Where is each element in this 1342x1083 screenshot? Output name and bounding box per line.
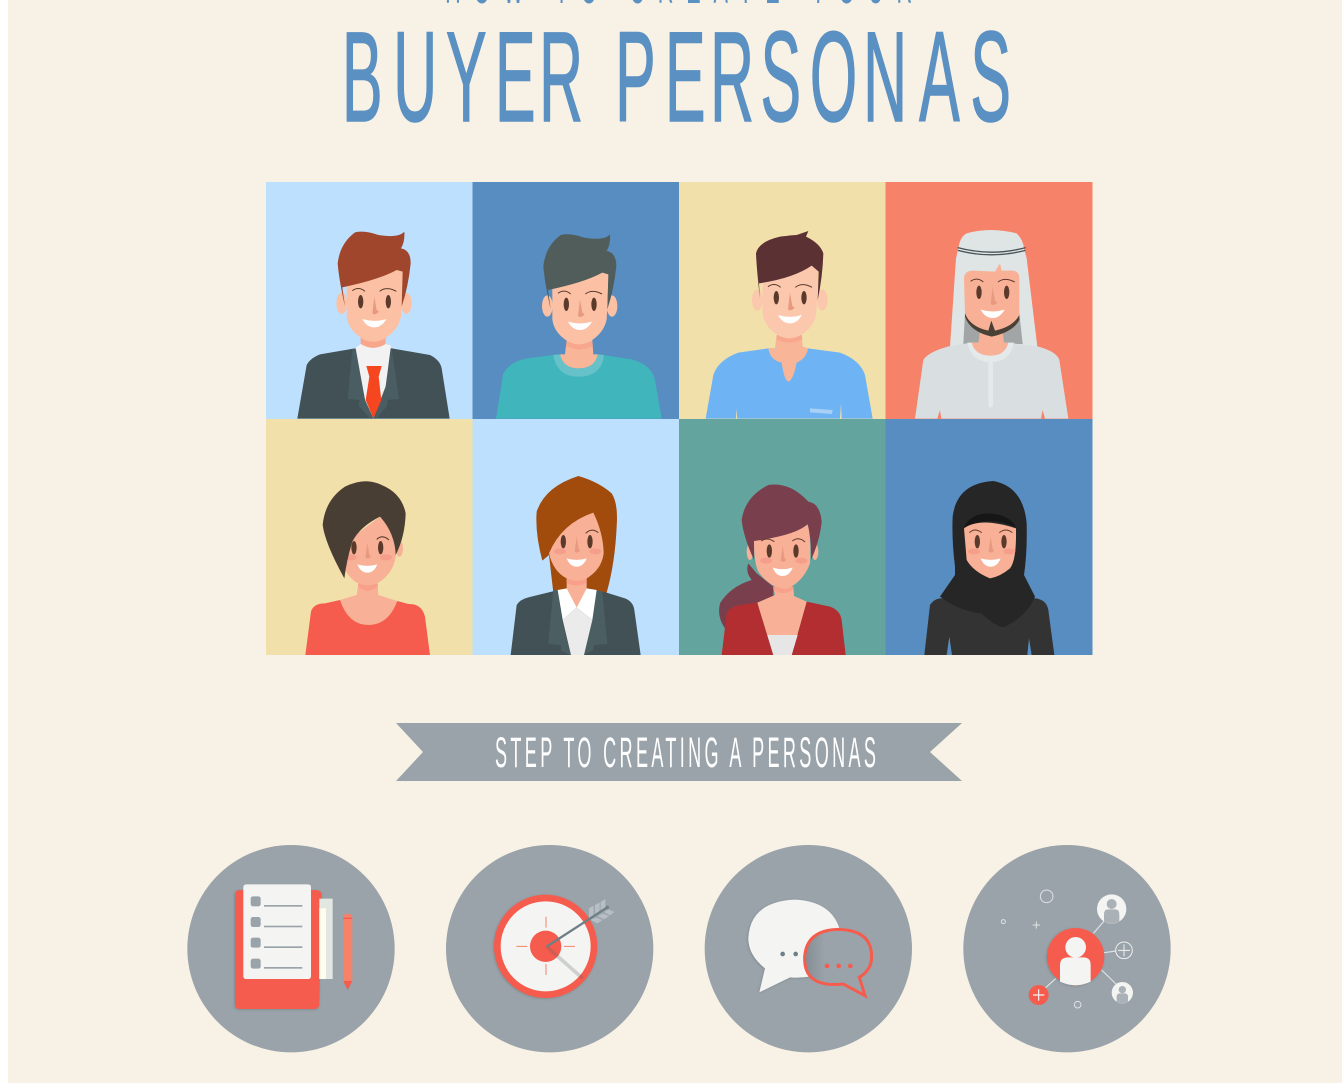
step icon: network of people <box>963 845 1171 1052</box>
persona: man in white thobe <box>915 230 1068 419</box>
persona: man in teal sweater <box>496 234 662 419</box>
persona: man in blue shirt <box>706 231 873 419</box>
persona: woman in coral top <box>305 481 430 655</box>
title: BUYER PERSONAS <box>342 6 1011 149</box>
banner: STEP TO CREATING A PERSONAS <box>495 728 876 776</box>
step icon: target <box>446 845 653 1052</box>
panel backgrounds <box>266 182 1092 655</box>
persona: woman in red cardigan <box>719 485 846 655</box>
step icon: speech bubbles <box>705 845 912 1052</box>
step icon: checklist <box>187 845 395 1052</box>
persona grid <box>266 182 1092 655</box>
persona: woman in dark blazer <box>511 476 641 655</box>
persona: man in suit <box>297 232 450 419</box>
banner <box>396 723 962 781</box>
persona: woman in black hijab <box>924 481 1054 655</box>
